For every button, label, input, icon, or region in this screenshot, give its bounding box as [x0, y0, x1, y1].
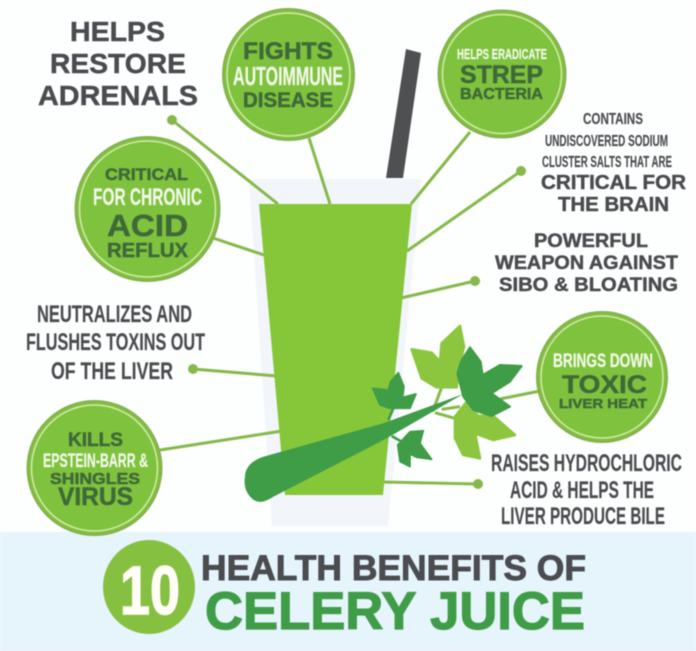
text: sodium cluster salts: CRITICAL FOR [541, 172, 687, 194]
panel: brings down toxic liver heat: LIVER HEAT [559, 396, 647, 411]
panel: kills epstein-barr and shingles virus: KILLS [68, 430, 123, 451]
text: sodium cluster salts [541, 111, 687, 216]
badge: number 10 [103, 540, 195, 634]
panel: helps eradicate strep bacteria [438, 10, 566, 138]
text: neutralizes and flushes toxins: FLUSHES TOXINS OUT [26, 329, 205, 356]
panel: kills epstein-barr and shingles virus: EPSTEIN-BARR & [43, 451, 148, 472]
heading: celery juice: CELERY JUICE [205, 582, 585, 641]
text: neutralizes and flushes toxins [26, 301, 205, 385]
text: helps restore adrenals: RESTORE [50, 48, 186, 79]
panel: kills epstein-barr and shingles virus: VIRUS [58, 483, 133, 511]
panel: fights autoimmune disease: DISEASE [243, 89, 333, 112]
panel: helps eradicate strep bacteria: STREP [460, 61, 543, 89]
text: neutralizes and flushes toxins: NEUTRALIZES AND [37, 301, 192, 328]
title banner [0, 532, 696, 651]
panel: critical for chronic acid reflux: FOR CHRONIC [93, 184, 202, 211]
panel: critical for chronic acid reflux: ACID [107, 208, 188, 243]
panel: critical for chronic acid reflux [76, 137, 220, 281]
text: weapon against sibo and bloating [495, 231, 678, 296]
panel: helps eradicate strep bacteria: HELPS ERADICATE [457, 46, 547, 63]
panel: critical for chronic acid reflux: CRITICAL [105, 165, 188, 184]
badge: number 10: 10 [120, 552, 180, 629]
text: sodium cluster salts: CONTAINS [583, 111, 643, 128]
connector lines [160, 120, 540, 484]
panel: fights autoimmune disease [223, 9, 354, 140]
text: helps restore adrenals: ADRENALS [38, 80, 198, 111]
straw [386, 49, 421, 178]
heading: health benefits of: HEALTH BENEFITS OF [201, 549, 586, 588]
text: weapon against sibo and bloating: SIBO & BLOATING [499, 275, 678, 296]
connector end dots [167, 115, 526, 489]
text: neutralizes and flushes toxins: OF THE LIVER [51, 358, 173, 385]
panel: fights autoimmune disease: FIGHTS [243, 38, 333, 65]
juice in glass [259, 204, 412, 495]
text: sodium cluster salts: THE BRAIN [558, 194, 669, 216]
panel: brings down toxic liver heat: BRINGS DOWN [553, 351, 653, 372]
text: weapon against sibo and bloating: WEAPON AGAINST [495, 253, 678, 274]
text: raises hydrochloric acid [491, 450, 682, 530]
panel: fights autoimmune disease: AUTOIMMUNE [233, 61, 343, 91]
text: helps restore adrenals [38, 16, 198, 111]
panel: brings down toxic liver heat [537, 312, 667, 442]
icon: celery stalk with leaves [245, 326, 522, 502]
panel: brings down toxic liver heat: TOXIC [562, 371, 647, 399]
panel: helps eradicate strep bacteria: BACTERIA [460, 86, 543, 103]
panel: kills epstein-barr and shingles virus [28, 401, 162, 535]
panel: kills epstein-barr and shingles virus: SHINGLES [50, 471, 140, 488]
panel: critical for chronic acid reflux: REFLUX [107, 240, 189, 262]
text: helps restore adrenals: HELPS [70, 16, 165, 47]
glass outline: pale glass body [249, 179, 421, 526]
text: weapon against sibo and bloating: POWERFUL [534, 231, 648, 252]
